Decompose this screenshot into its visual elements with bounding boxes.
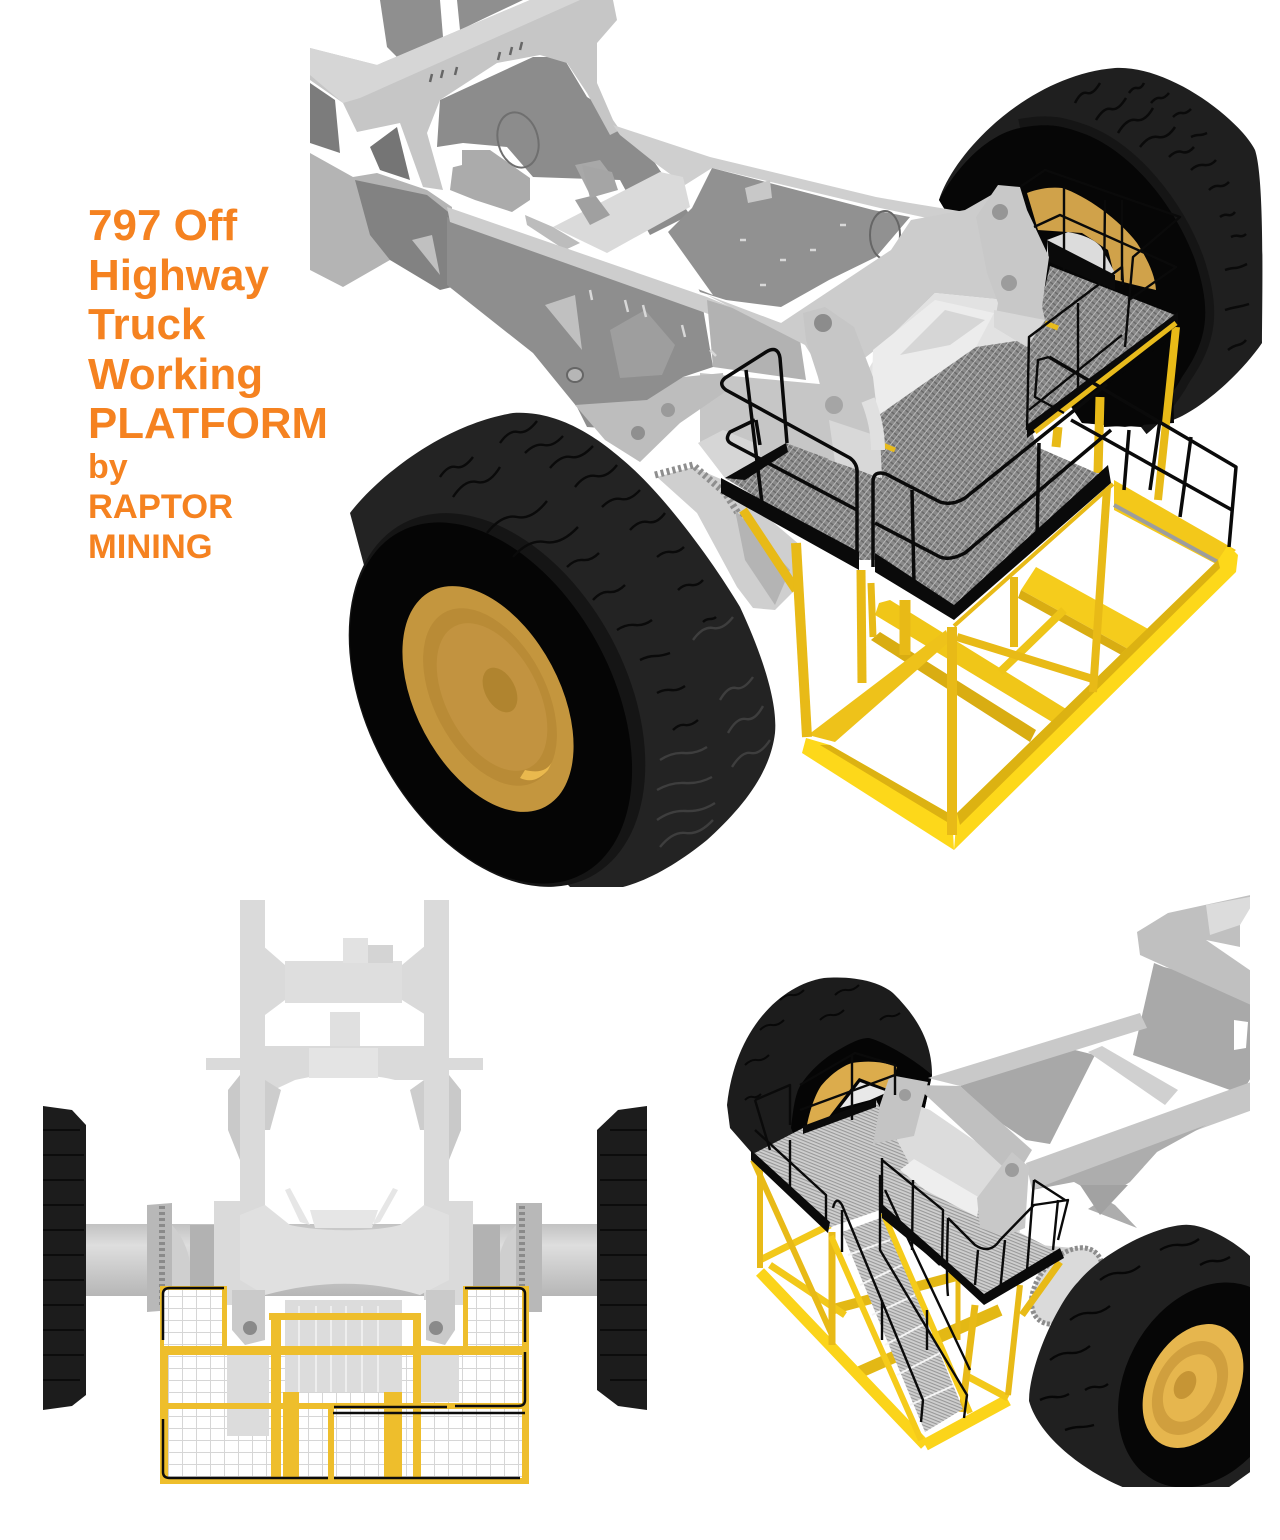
rear three-quarter view (727, 895, 1250, 1487)
rear wheel hub (1047, 232, 1115, 287)
title: MINING (88, 528, 213, 566)
rear pivot casting (976, 185, 1049, 347)
back beams (1021, 567, 1150, 655)
upper cross member (310, 0, 620, 190)
rear tyre (939, 68, 1262, 427)
front rail and side panels (310, 153, 806, 430)
front pivot casting (803, 307, 882, 478)
axle arm under deck (575, 373, 725, 462)
title (88, 201, 328, 566)
front wheel rim (367, 557, 609, 841)
platform yellow steel (160, 1286, 529, 1484)
black mass behind deck (1104, 337, 1174, 427)
platform support stand (743, 327, 1238, 850)
guard railings (722, 350, 1236, 583)
title: Truck (88, 300, 206, 349)
title: by (88, 448, 128, 486)
stair treads (831, 1213, 970, 1440)
rear wheel rim (1027, 188, 1156, 290)
axle hub and brake ring (655, 430, 800, 610)
tyre grooves (43, 1130, 647, 1380)
deck black edges (721, 240, 1178, 620)
title: RAPTOR (88, 488, 233, 526)
far left block and web (310, 83, 410, 180)
rear inner web (655, 168, 910, 307)
near tyre (1029, 1224, 1250, 1487)
top view (43, 900, 647, 1484)
axle body under deck (700, 373, 835, 478)
legs and braces (743, 327, 1176, 835)
platform black handrails (163, 1288, 525, 1478)
title: Working (88, 350, 263, 399)
right plate (1114, 480, 1236, 565)
axle hub and ring (1029, 1245, 1103, 1327)
transmission block (850, 293, 1027, 440)
platform deck grating (721, 240, 1178, 620)
far tyre (727, 977, 932, 1160)
yellow deck stubs and beam (878, 323, 1176, 450)
frame (206, 900, 483, 1345)
title: Highway (88, 251, 269, 300)
cross tube (525, 165, 690, 253)
far wheel rim (807, 1062, 897, 1125)
front cross member (707, 190, 1025, 385)
rear web panel (432, 57, 690, 235)
near wheel rim (1142, 1324, 1244, 1448)
guard railings (755, 1053, 1068, 1422)
chassis frame (880, 894, 1255, 1232)
rear rail (613, 125, 965, 225)
base frame (954, 545, 1238, 850)
left tyre (43, 1106, 86, 1410)
right tyre (597, 1106, 647, 1410)
stand (753, 1160, 1060, 1445)
transmission and pivots over deck (873, 1075, 1029, 1236)
front tyre (288, 413, 775, 938)
axle (86, 1201, 597, 1312)
title: 797 Off (88, 201, 238, 250)
deck (751, 1099, 1064, 1305)
far wheel hub (840, 1082, 888, 1108)
main view: chassis, tyres and platform (288, 0, 1262, 938)
title: PLATFORM (88, 399, 328, 448)
platform grid panels (160, 1286, 529, 1484)
frame towers at top (380, 0, 523, 57)
